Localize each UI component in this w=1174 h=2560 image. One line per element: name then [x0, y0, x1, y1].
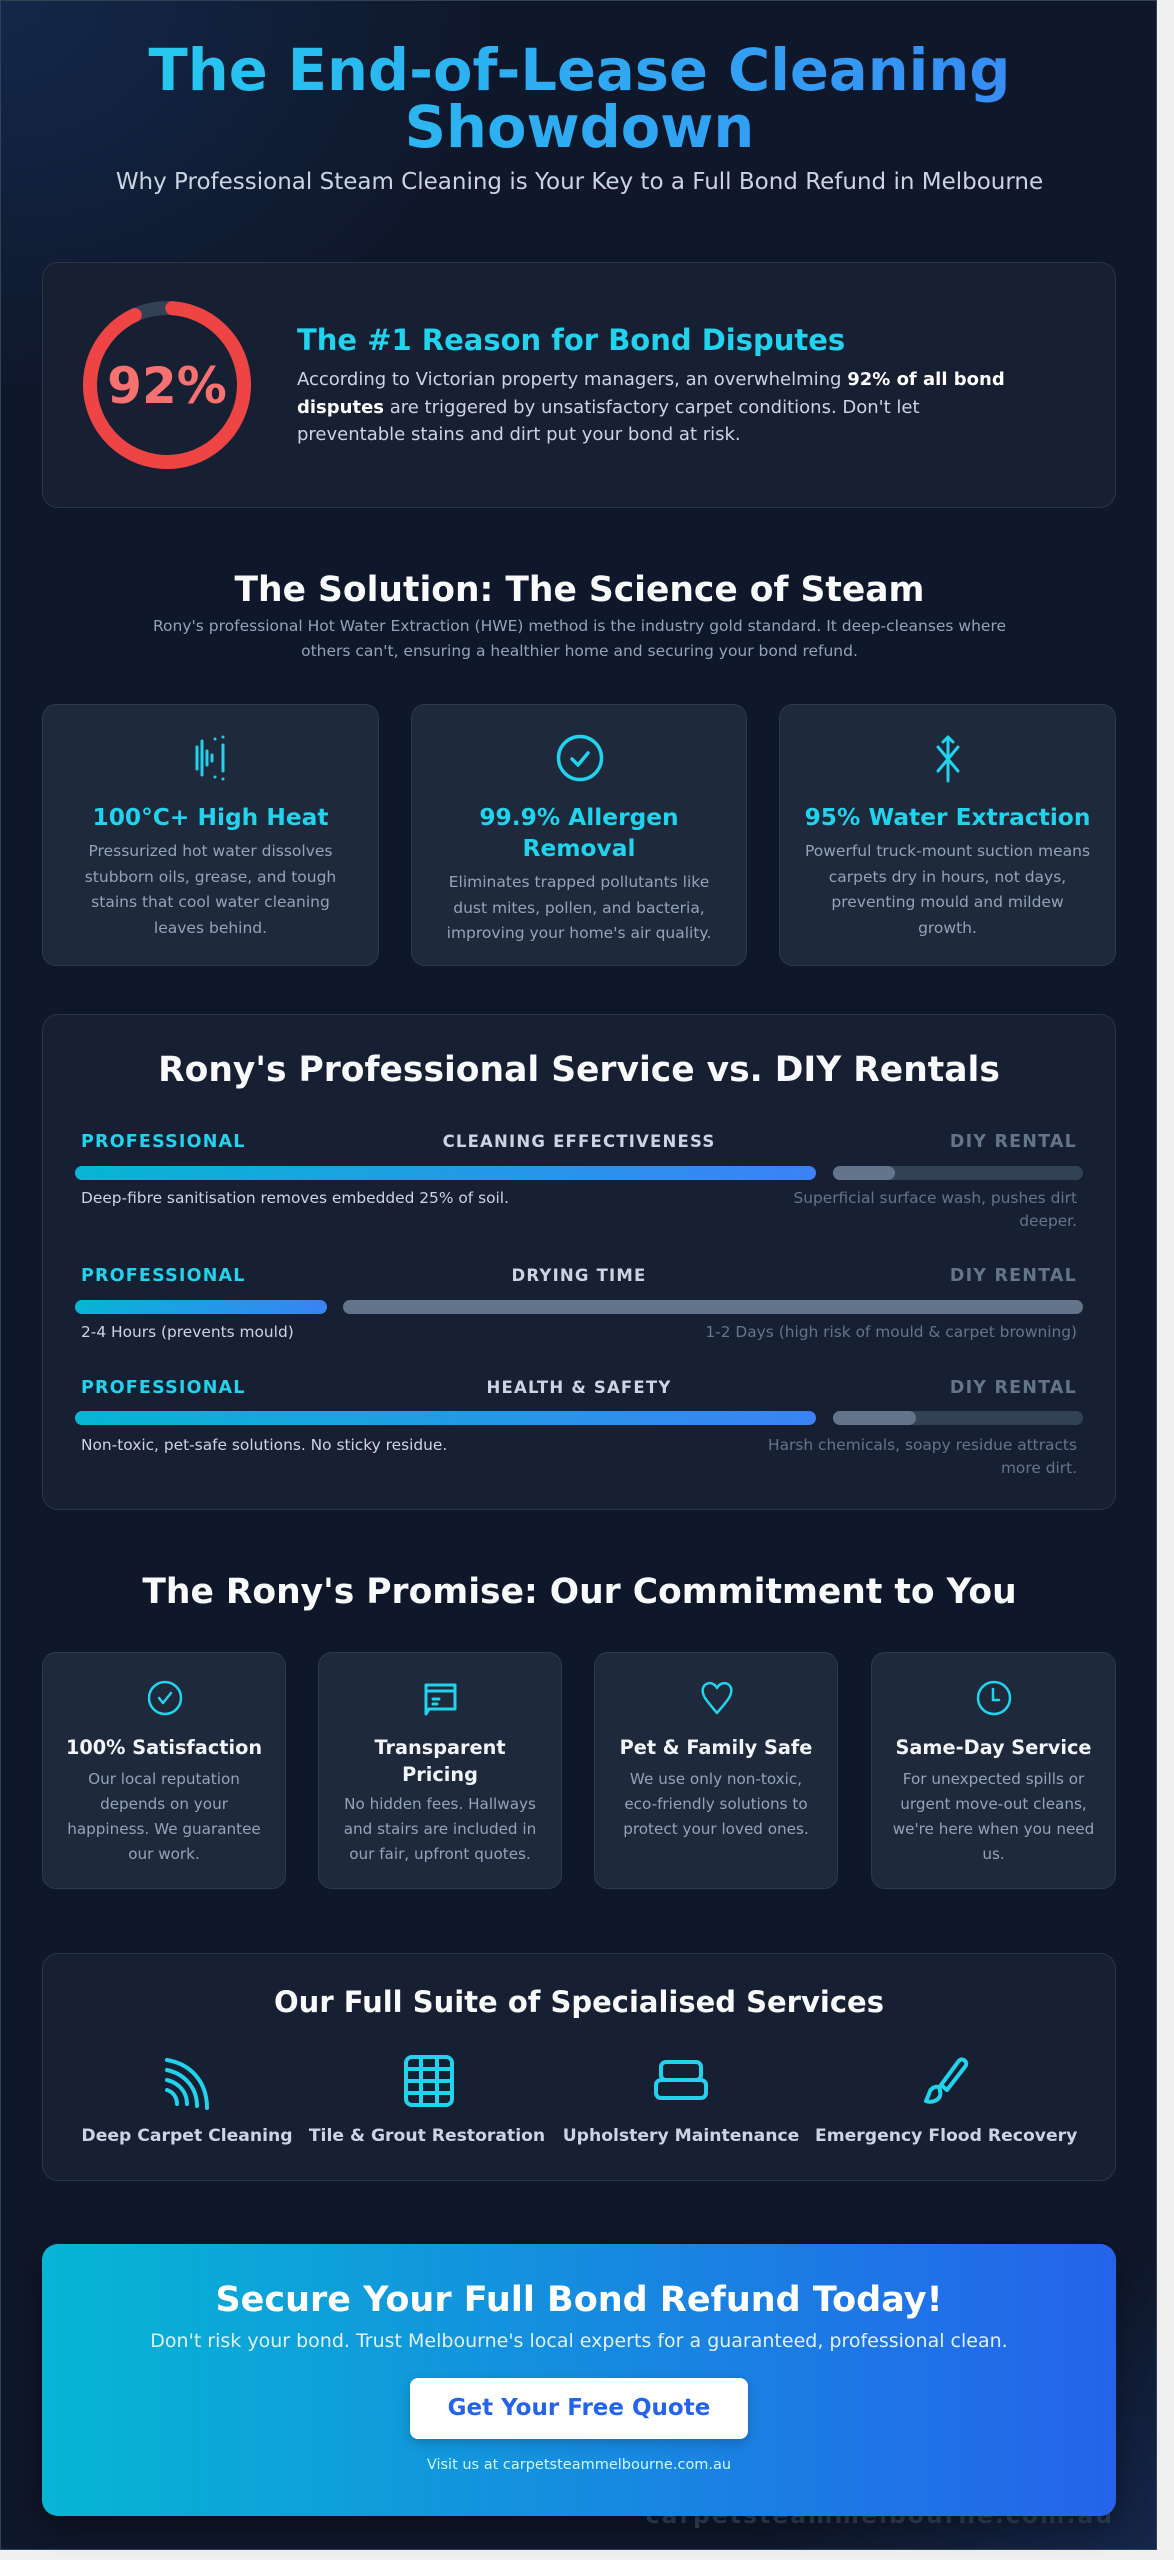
card: water extraction [779, 704, 1116, 966]
title [1, 42, 1158, 156]
card: allergen removal [411, 704, 747, 966]
row: cleaning effectiveness: Deep-fibre sanitisation removes embedded 25% of soil. [81, 1189, 509, 1207]
icon: heat waves [196, 736, 224, 780]
text: Don't risk your bond. Trust Melbourne's local experts for a guaranteed, professional clean. [150, 2330, 1008, 2352]
row: drying time: 1-2 Days (high risk of mould & carpet browning) [705, 1323, 1077, 1341]
card: transparent pricing [318, 1652, 562, 1889]
icon: check circle [556, 734, 604, 782]
title: Removal [523, 835, 635, 862]
title [479, 804, 679, 862]
heading: promise: The Rony's Promise: Our Commitment to You [142, 1572, 1017, 1612]
panel: services [42, 1953, 1116, 2181]
icon: extraction [936, 735, 960, 782]
card: same-day service [871, 1652, 1116, 1889]
service: tile & grout: Tile & Grout Restoration [309, 2126, 545, 2146]
card: satisfaction [42, 1652, 286, 1889]
row: cleaning effectiveness: CLEANING EFFECTIVENESS [443, 1132, 715, 1151]
title: Same-Day Service [896, 1736, 1091, 1759]
heading: Our Full Suite of Specialised Services [274, 1985, 884, 2019]
text: Pressurized hot water dissolves stubborn oils, grease, and tough stains that cool water cleaning leaves behind. [85, 842, 336, 937]
title: 95% Water Extraction [805, 804, 1090, 831]
icon: clock [976, 1680, 1012, 1716]
icon: check circle [148, 1680, 182, 1716]
title [374, 1736, 506, 1786]
text: Our local reputation depends on your happiness. We guarantee our work. [67, 1770, 261, 1863]
icon: heart [701, 1682, 733, 1714]
row: cleaning effectiveness: Superficial surface wash, pushes dirt deeper. [793, 1189, 1077, 1230]
text: Eliminates trapped pollutants like dust mites, pollen, and bacteria, improving your home's air quality. [447, 873, 711, 942]
row: health & safety: Harsh chemicals, soapy residue attracts more dirt. [768, 1436, 1077, 1477]
row: drying time: 2-4 Hours (prevents mould) [81, 1323, 294, 1341]
icon: sofa [654, 2060, 708, 2100]
watermark: carpetsteammelbourne.com.au [646, 2501, 1114, 2529]
title: The End-of-Lease Cleaning [149, 37, 1010, 104]
title: Showdown [405, 94, 754, 161]
text: For unexpected spills or urgent move-out cleans, we're here when you need us. [893, 1770, 1094, 1863]
row: health & safety [75, 1378, 1083, 1477]
heading: #1 reason: The #1 Reason for Bond Disputes [297, 323, 845, 357]
service: upholstery: Upholstery Maintenance [563, 2126, 799, 2146]
icon: receipt [424, 1684, 456, 1716]
row: health & safety: HEALTH & SAFETY [486, 1378, 671, 1397]
title: 100% Satisfaction [66, 1736, 262, 1759]
card: pet & family safe [594, 1652, 838, 1889]
text: stat body: According to Victorian property managers, an overwhelming 92% of all bond disputes are triggered by unsatisfactory carpet conditions. Don't let preventable stains and dirt put your bond at risk. [297, 369, 1005, 445]
row: drying time: DIY RENTAL [950, 1266, 1077, 1286]
text: website: Visit us at carpetsteammelbourne.com.au [427, 2457, 731, 2473]
row: drying time [75, 1266, 1083, 1341]
row: health & safety: Non-toxic, pet-safe solutions. No sticky residue. [81, 1436, 447, 1454]
text: Powerful truck-mount suction means carpets dry in hours, not days, preventing mould and mildew growth. [805, 842, 1090, 937]
heading: Rony's Professional Service vs. DIY Rentals [158, 1050, 1000, 1090]
row: health & safety: PROFESSIONAL [81, 1378, 246, 1398]
service: flood recovery: Emergency Flood Recovery [815, 2126, 1077, 2146]
row: health & safety: DIY RENTAL [950, 1378, 1077, 1398]
service: deep carpet: Deep Carpet Cleaning [81, 2126, 293, 2146]
card: high heat [42, 704, 379, 966]
text: No hidden fees. Hallways and stairs are included in our fair, upfront quotes. [344, 1795, 536, 1863]
service: tile & grout [308, 2055, 545, 2146]
icon: waves [164, 2058, 209, 2110]
panel: 92% stat [42, 262, 1116, 508]
button [410, 2378, 748, 2439]
service: flood recovery [815, 2057, 1077, 2146]
text: We use only non-toxic, eco-friendly solutions to protect your loved ones. [623, 1770, 809, 1838]
chart: 92% ring [83, 301, 251, 469]
title: 100°C+ High Heat [92, 804, 329, 831]
row: drying time: PROFESSIONAL [81, 1266, 246, 1286]
title: 99.9% Allergen [479, 804, 679, 831]
icon: brush [924, 2057, 968, 2104]
text: solution description: Rony's professional Hot Water Extraction (HWE) method is the industry gold standard. It deep-cleanses where others can't, ensuring a healthier home and securing your bond refund. [153, 617, 1006, 660]
title: Transparent [374, 1736, 506, 1759]
panel: call to action [42, 2244, 1116, 2516]
row: cleaning effectiveness [75, 1132, 1083, 1230]
row: cleaning effectiveness: DIY RENTAL [950, 1132, 1077, 1152]
chart: 92% ring: 92% [107, 357, 227, 415]
subtitle: Why Professional Steam Cleaning is Your Key to a Full Bond Refund in Melbourne [116, 169, 1043, 195]
panel: comparison [42, 1014, 1116, 1510]
heading: solution: The Solution: The Science of Steam [235, 570, 924, 610]
service: upholstery [563, 2060, 799, 2146]
service: deep carpet [81, 2058, 293, 2146]
button: Get Your Free Quote [448, 2395, 710, 2421]
row: cleaning effectiveness: PROFESSIONAL [81, 1132, 246, 1152]
title: Pet & Family Safe [620, 1736, 812, 1759]
heading: Secure Your Full Bond Refund Today! [215, 2280, 943, 2320]
icon: grid [404, 2055, 454, 2107]
row: drying time: DRYING TIME [512, 1266, 646, 1285]
title: Pricing [402, 1763, 478, 1786]
